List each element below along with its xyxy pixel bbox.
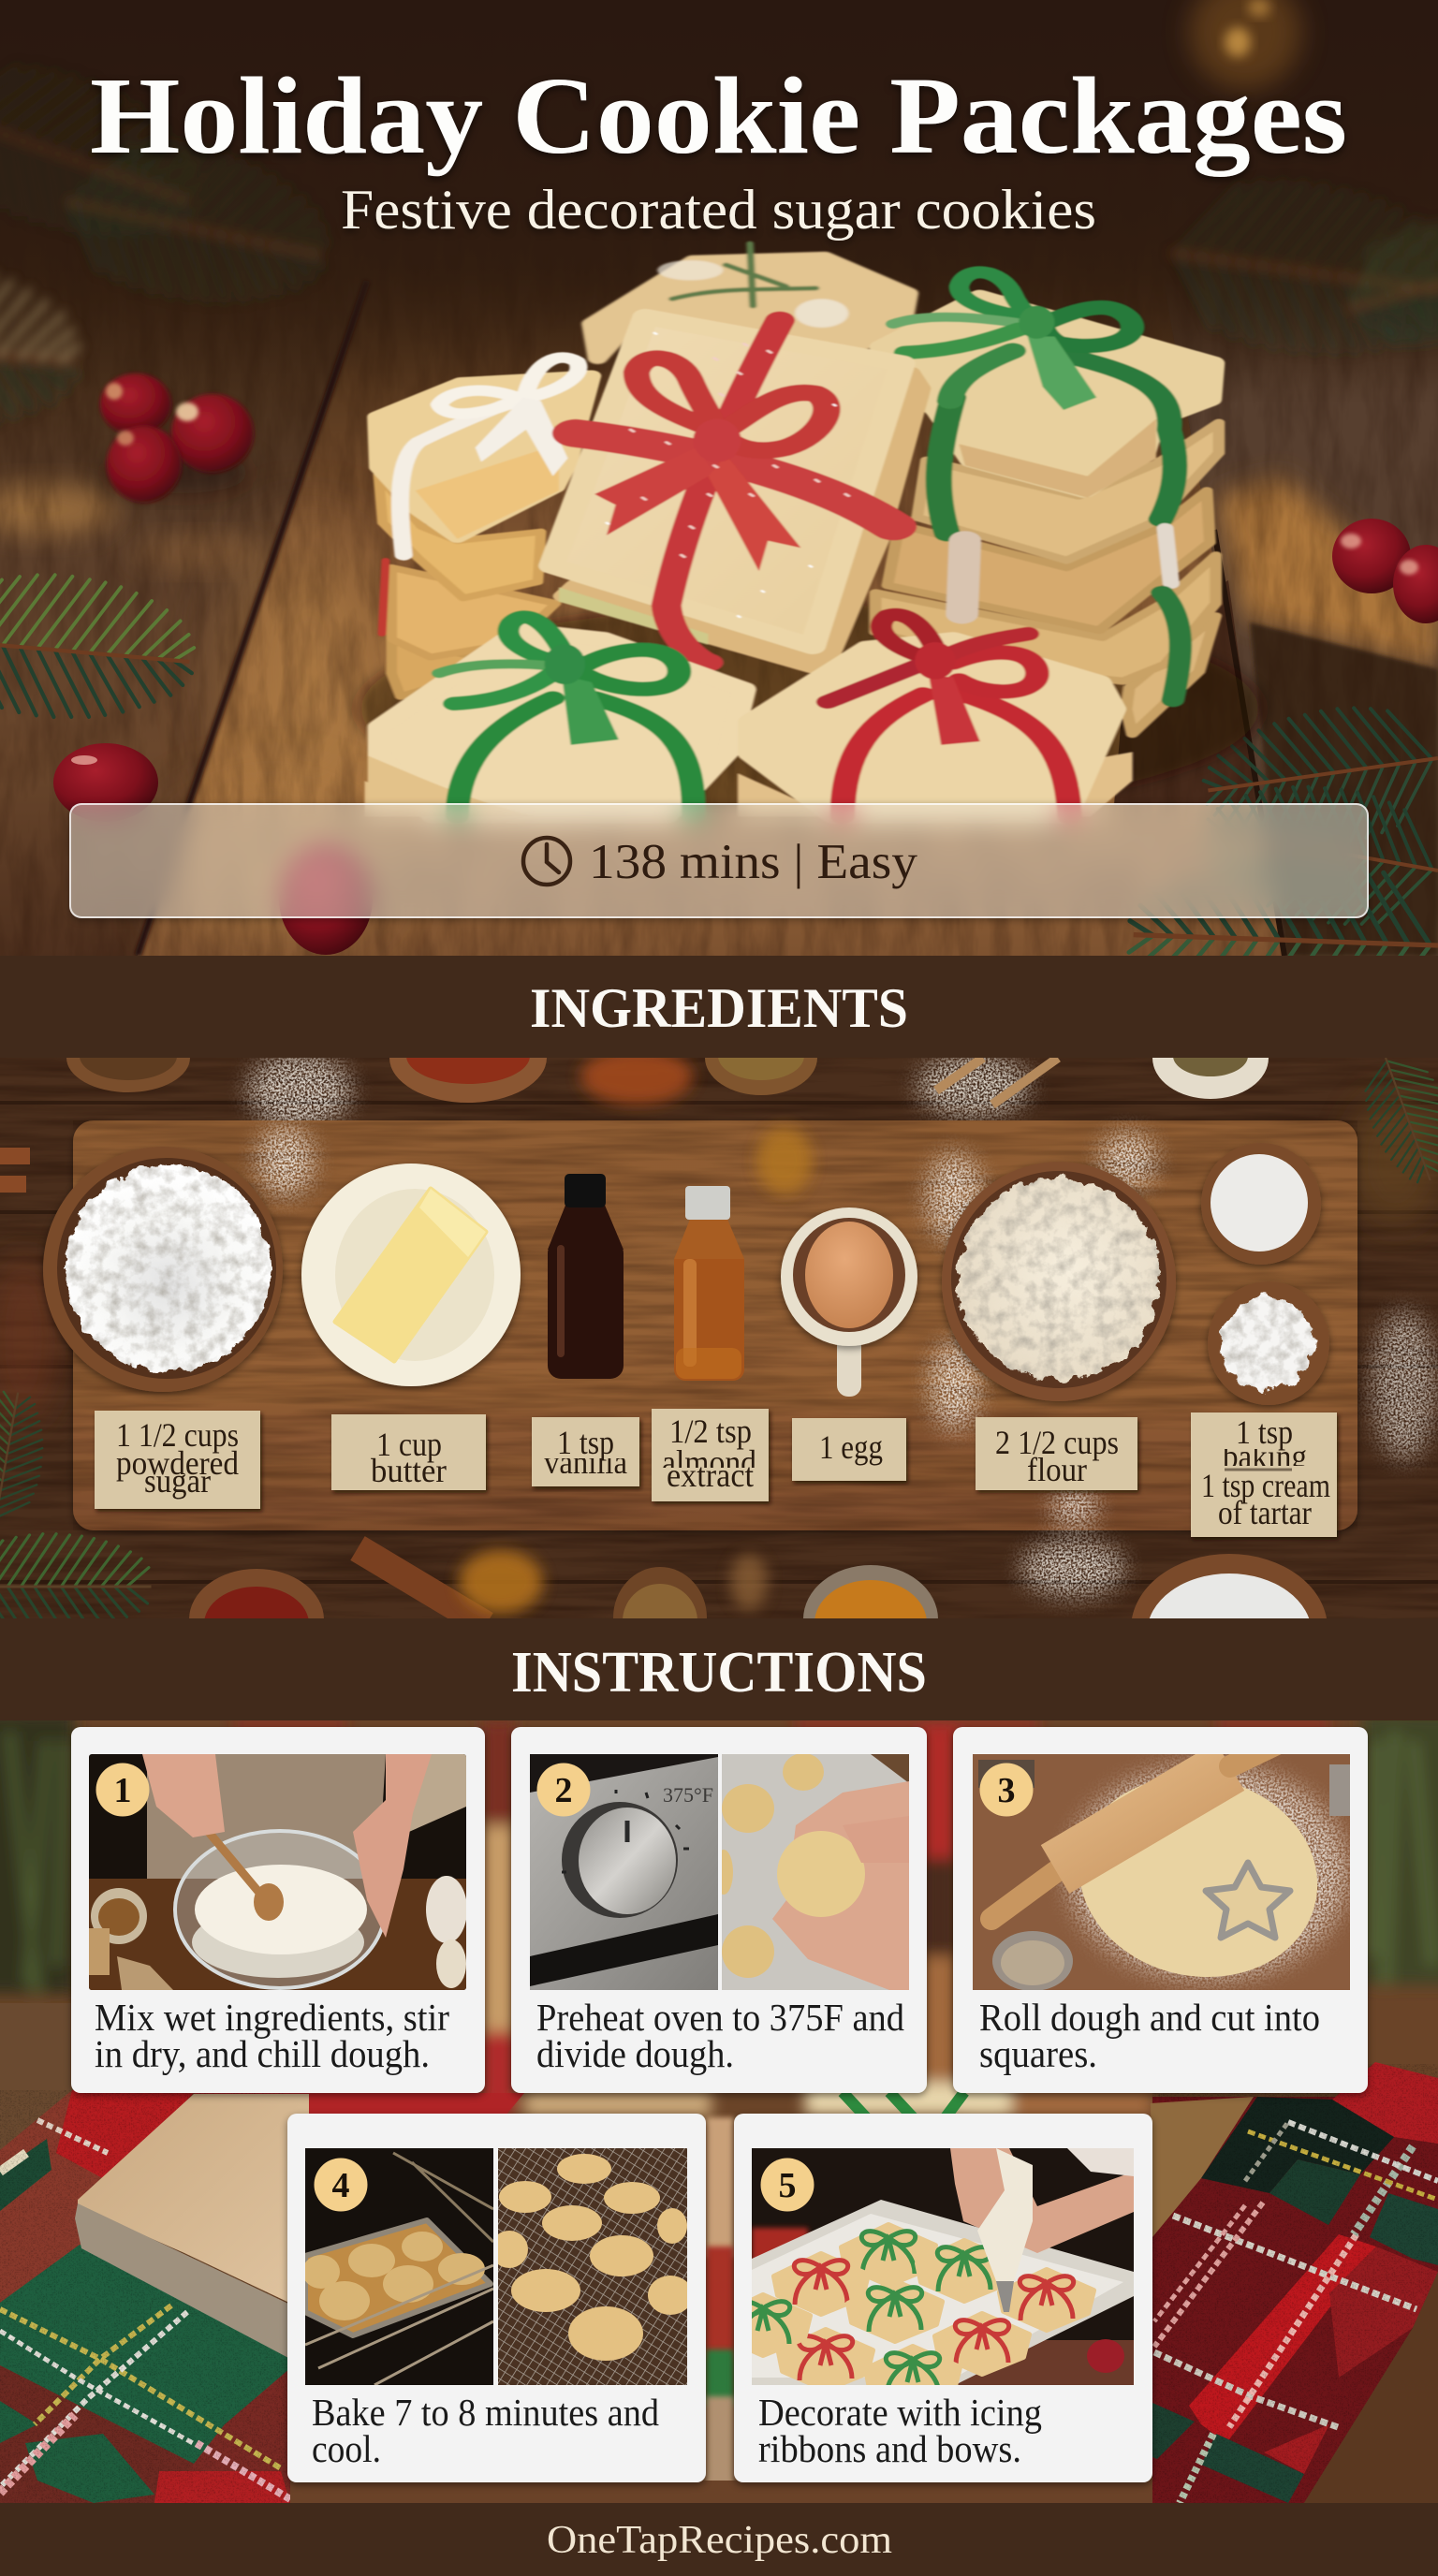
label: baking soda and cream of tartar: of tartar: [1218, 1494, 1312, 1531]
hero photo: cookies on wooden table with title: [0, 0, 1438, 956]
wooden boards behind lower cards: [75, 2094, 1254, 2503]
step 5 text: ribbons and bows.: [758, 2427, 1021, 2470]
tartan cloth left: [0, 2090, 290, 2503]
label: baking soda and cream of tartar: [1191, 1412, 1337, 1537]
label: powdered sugar: powdered: [116, 1444, 239, 1482]
banner: instructions heading: [0, 1618, 1438, 1720]
front left cookie with green bow: [365, 617, 744, 816]
step 4 text: [312, 2391, 659, 2470]
label: butter: 1 cup: [376, 1426, 442, 1463]
small bowl: baking soda: [1201, 1143, 1321, 1265]
egg in cup: [781, 1208, 917, 1397]
main front cookie with red bow: [551, 316, 922, 671]
step 1 text: Mix wet ingredients, stir: [95, 1996, 449, 2039]
step card 4: [287, 2114, 706, 2482]
step 2 photo right: dividing dough: [714, 1753, 909, 1990]
label: almond extract: extract: [667, 1456, 754, 1494]
number badge 1: 1: [114, 1771, 131, 1810]
label: powdered sugar: [95, 1411, 260, 1509]
step 5 photo: piping icing onto cookies: [716, 2148, 1134, 2407]
cloth weave texture: [0, 2064, 1438, 2503]
label: flour: [976, 1417, 1137, 1490]
number badge 5: [760, 2159, 814, 2211]
spice bowls along top edge: [0, 1058, 1438, 1193]
number badge 2: 2: [554, 1771, 573, 1810]
number badge 4: [315, 2159, 367, 2211]
spice bowls along bottom edge: [0, 1385, 1328, 1704]
number badge 1: [95, 1764, 150, 1816]
blurred upper background: [0, 1713, 1438, 2503]
footer banner with website: [0, 2503, 1438, 2576]
blurred pine branches behind title: [0, 38, 1438, 441]
step 4 photo right: cookies on cooling rack: [491, 2148, 693, 2385]
number badge 3: [979, 1764, 1034, 1816]
sharp pine branches: [0, 565, 1438, 1038]
label: powdered sugar: 1 1/2 cups: [116, 1416, 239, 1454]
footer banner with website: OneTapRecipes.com: [547, 2519, 892, 2562]
label: baking soda and cream of tartar: baking: [1223, 1438, 1307, 1475]
banner: instructions heading: INSTRUCTIONS: [511, 1641, 927, 1705]
label: almond extract: 1/2 tsp: [669, 1412, 752, 1450]
label: powdered sugar: sugar: [144, 1462, 211, 1500]
tartan cloth right: [1152, 2062, 1438, 2503]
label: vanilla: [532, 1417, 639, 1486]
number badge 3: 3: [998, 1771, 1015, 1810]
bottle: vanilla: [548, 1174, 624, 1379]
step card 1: [71, 1727, 485, 2093]
step 4 photo left: cookies in oven: [302, 2148, 493, 2385]
cranberries on table: [53, 373, 1438, 955]
label: egg: 1 egg: [819, 1428, 883, 1466]
label: flour: 2 1/2 cups: [995, 1424, 1119, 1461]
step card 3: [953, 1727, 1368, 2093]
label: egg: [792, 1418, 906, 1481]
step 2 photo left: oven dial: [530, 1754, 718, 1990]
flour and spice dust on board: [257, 1125, 1156, 1528]
bowl: flour: [942, 1162, 1176, 1401]
time and difficulty text: 138 mins | Easy: [589, 835, 918, 889]
step 4 text: cool.: [312, 2427, 381, 2470]
panel: ingredients scene: [0, 1013, 1438, 1704]
shadow under cookies: [356, 602, 1264, 816]
cookie stack with ribbons: [356, 243, 1264, 816]
bowl: powdered sugar: [43, 1147, 283, 1392]
icon: clock: [523, 838, 570, 885]
title: Holiday Cookie Packages: [90, 54, 1347, 177]
subtitle: Festive decorated sugar cookies: [341, 179, 1096, 241]
step card 5: [716, 2114, 1152, 2482]
step 3 text: [979, 1996, 1320, 2075]
step 5 text: Decorate with icing: [758, 2391, 1042, 2434]
step 3 text: Roll dough and cut into: [979, 1996, 1320, 2039]
small bowl: cream of tartar: [1208, 1281, 1329, 1405]
wood floor at lower right: [1304, 2272, 1438, 2503]
number badge 5: 5: [779, 2166, 796, 2205]
label: baking soda and cream of tartar: 1 tsp cream: [1201, 1467, 1330, 1504]
label: vanilla: vanilla: [544, 1443, 627, 1481]
back cookie with sprig: [592, 243, 908, 358]
step 2 text: [536, 1996, 904, 2075]
step 1 text: in dry, and chill dough.: [95, 2032, 430, 2075]
step 4 text: Bake 7 to 8 minutes and: [312, 2391, 659, 2434]
dark wood table: [0, 1058, 1438, 1618]
right stack of cookies with green bow: [875, 272, 1219, 734]
wood corner at left: [0, 2003, 73, 2150]
label: almond extract: [652, 1409, 769, 1501]
label: vanilla: 1 tsp: [557, 1424, 614, 1461]
number badge 2: [537, 1764, 590, 1816]
label: butter: [331, 1414, 486, 1490]
banner: ingredients heading: INGREDIENTS: [530, 977, 908, 1039]
step 3 text: squares.: [979, 2032, 1097, 2075]
plate with butter: [301, 1164, 521, 1386]
glass time and difficulty bar: [69, 803, 1369, 918]
panel: instructions background, blurred cookies and tartan cloth: [0, 1713, 1438, 2503]
label: butter: butter: [371, 1452, 447, 1489]
step 2 text: divide dough.: [536, 2032, 734, 2075]
left stack of cookies with white bow: [376, 358, 592, 696]
label: almond extract: almond: [662, 1443, 756, 1481]
number badge 4: 4: [331, 2166, 350, 2205]
step 2 photo left: oven dial: 375°F: [663, 1783, 713, 1807]
cutting board: [73, 1120, 1357, 1530]
front right cookie with red bow: [738, 615, 1132, 816]
step 1 text: [95, 1996, 449, 2075]
step card 2: [511, 1727, 927, 2093]
wooden table background: [0, 0, 1438, 956]
step 2 text: Preheat oven to 375F and: [536, 1996, 904, 2039]
step 5 text: [758, 2391, 1042, 2470]
step 1 photo: mixing dough: [89, 1754, 467, 1990]
label: baking soda and cream of tartar: 1 tsp: [1236, 1413, 1293, 1451]
banner: ingredients heading: [0, 956, 1438, 1058]
step 3 photo: rolling dough: [973, 1741, 1350, 1998]
label: flour: flour: [1027, 1451, 1087, 1488]
lower page: ingredients, instructions and footer: [0, 977, 1438, 2562]
bottle: almond extract: [674, 1186, 744, 1381]
